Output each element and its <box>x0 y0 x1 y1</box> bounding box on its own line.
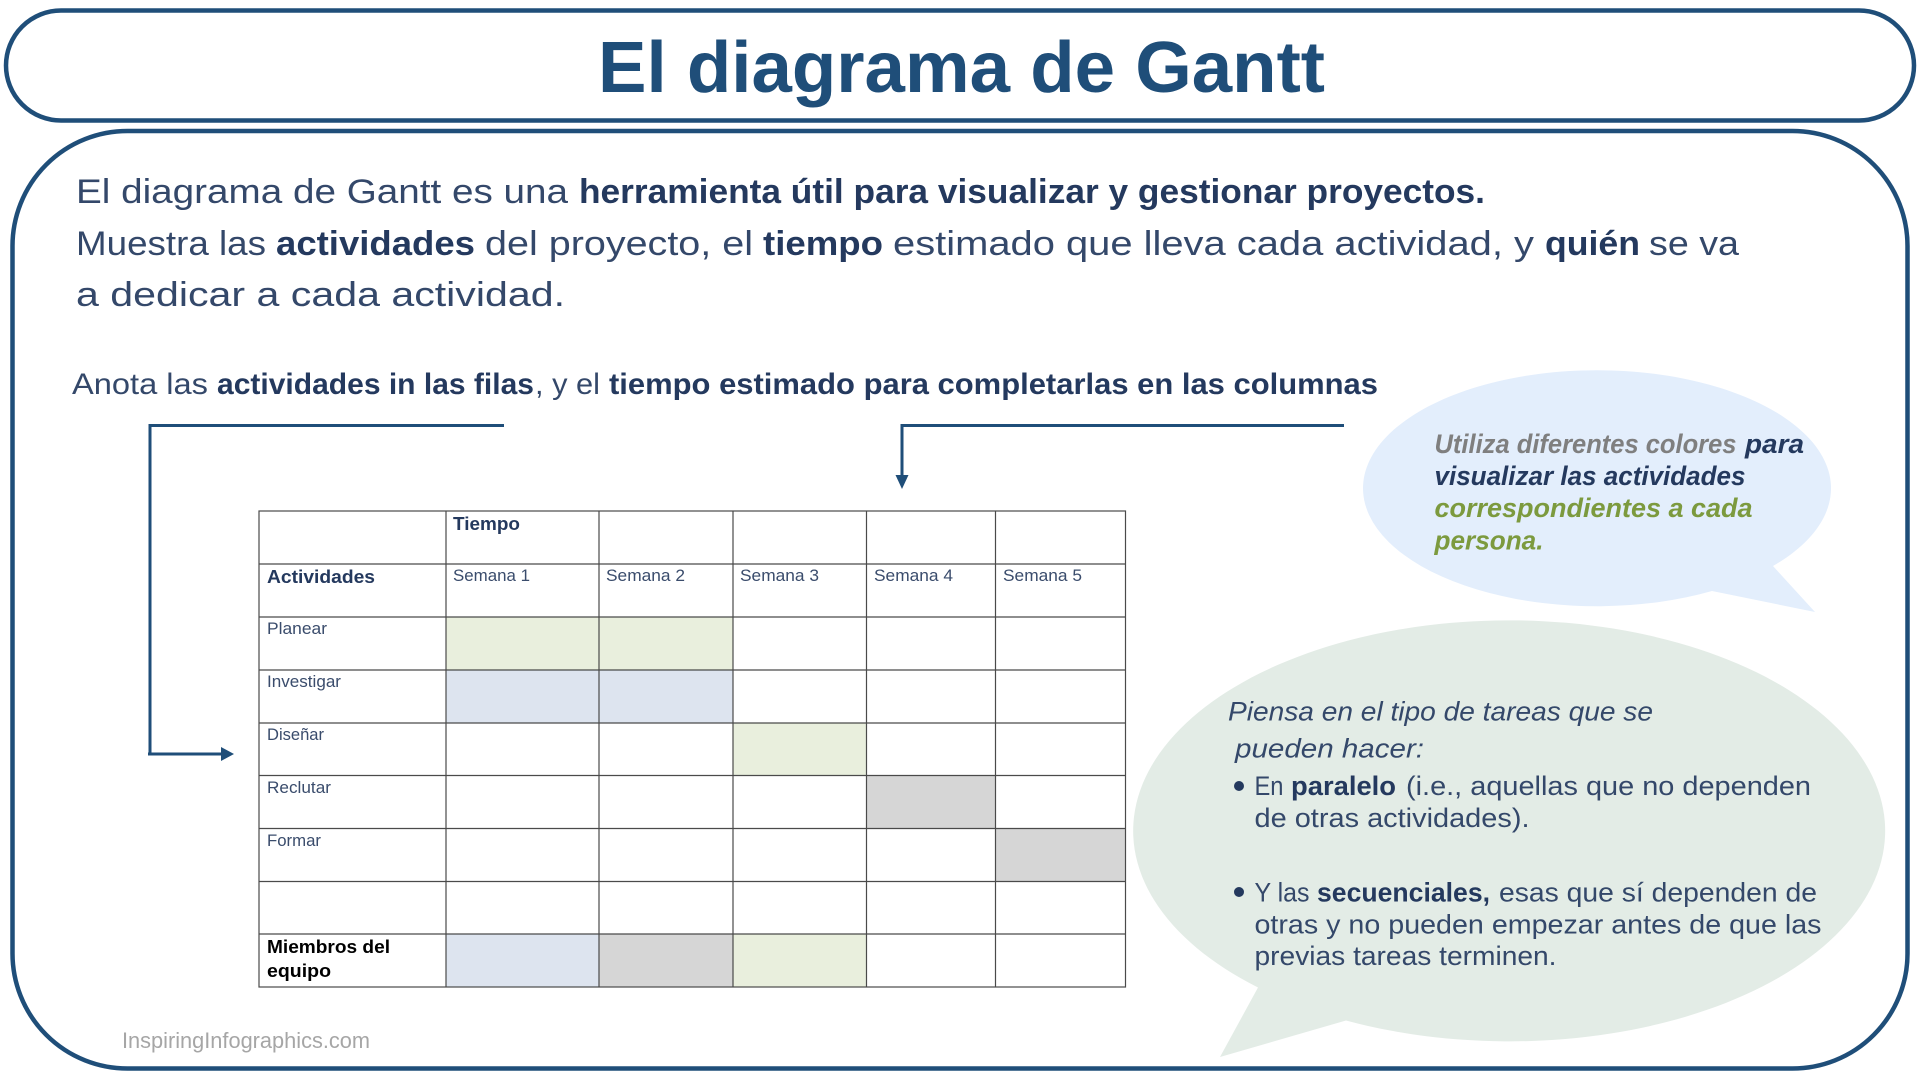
instruction line: , y el <box>535 368 600 401</box>
bullet: parallel tasks: de otras actividades). <box>1254 803 1530 833</box>
activity labels: Formar <box>267 832 322 850</box>
callout text: colours: para <box>1744 429 1804 459</box>
table header labels: Semana 1 <box>453 567 530 585</box>
bullet: sequential tasks: secuenciales, <box>1317 878 1490 908</box>
team members label <box>267 936 390 981</box>
intro text: quién <box>1545 225 1640 263</box>
callout text: colours <box>1434 429 1804 556</box>
instruction line: tiempo estimado para completarlas en las columnas <box>609 368 1378 401</box>
table header labels <box>267 513 1082 587</box>
activity labels: Planear <box>267 620 328 638</box>
speech bubble: blue <box>1363 370 1831 612</box>
table header labels: Semana 2 <box>606 567 685 585</box>
table header labels: Semana 4 <box>874 567 953 585</box>
bullet: parallel tasks: paralelo <box>1291 771 1396 801</box>
intro text: se va <box>1649 225 1740 263</box>
table grid <box>259 511 1126 987</box>
team members label: Miembros del <box>267 936 390 957</box>
bullet: sequential tasks <box>1234 878 1822 971</box>
source credit: InspiringInfographics.com <box>122 1028 370 1053</box>
bullet: sequential tasks: otras y no pueden empezar antes de que las <box>1254 910 1822 940</box>
table header labels: Semana 3 <box>740 567 819 585</box>
arrow: to time columns <box>896 426 1344 489</box>
speech bubble: green <box>1133 620 1885 1057</box>
callout intro text <box>1228 696 1653 764</box>
callout text: colours: Utiliza diferentes colores <box>1434 429 1736 459</box>
table header labels: Actividades <box>267 566 375 587</box>
instruction line: actividades in las filas <box>217 368 534 401</box>
intro text: Muestra las <box>76 225 266 263</box>
activity labels: Diseñar <box>267 726 325 744</box>
instruction line <box>72 368 1378 401</box>
callout text: colours: persona. <box>1434 526 1544 556</box>
bullet: sequential tasks: Y las <box>1254 878 1310 908</box>
table header labels: Semana 5 <box>1003 567 1082 585</box>
team members label: equipo <box>267 960 331 981</box>
title: El diagrama de Gantt <box>598 28 1325 108</box>
intro text: El diagrama de Gantt es una <box>76 173 569 211</box>
bullet: parallel tasks: (i.e., aquellas que no dependen <box>1406 771 1811 801</box>
activity labels: Investigar <box>267 673 342 691</box>
callout: task types <box>1133 620 1885 1057</box>
bullet: sequential tasks: previas tareas terminen. <box>1254 941 1556 971</box>
intro text: herramienta útil para visualizar y gestionar proyectos. <box>579 173 1485 211</box>
gantt table <box>259 511 1126 987</box>
callout intro text: pueden hacer: <box>1234 734 1424 764</box>
title banner <box>6 10 1914 120</box>
intro text: actividades <box>276 225 475 263</box>
callout text: colours: visualizar las actividades <box>1434 461 1746 491</box>
bullet: parallel tasks: En <box>1254 771 1284 801</box>
table header labels: Tiempo <box>453 513 520 534</box>
bullet: parallel tasks <box>1234 771 1811 833</box>
intro text: estimado que lleva cada actividad, y <box>893 225 1535 263</box>
callout intro text: Piensa en el tipo de tareas que se <box>1228 696 1653 726</box>
callout: colours <box>1363 370 1831 612</box>
activity colour cells <box>446 617 1126 987</box>
activity labels <box>267 620 342 850</box>
bullet: sequential tasks: esas que sí dependen de <box>1499 878 1817 908</box>
instruction line: Anota las <box>72 368 208 401</box>
intro text <box>76 173 1740 314</box>
callout text: colours: correspondientes a cada <box>1434 493 1752 523</box>
intro text: tiempo <box>763 225 883 263</box>
intro text: del proyecto, el <box>485 225 753 263</box>
activity labels: Reclutar <box>267 779 332 797</box>
intro text: a dedicar a cada actividad. <box>76 276 565 314</box>
arrow: to activity rows <box>148 426 504 761</box>
